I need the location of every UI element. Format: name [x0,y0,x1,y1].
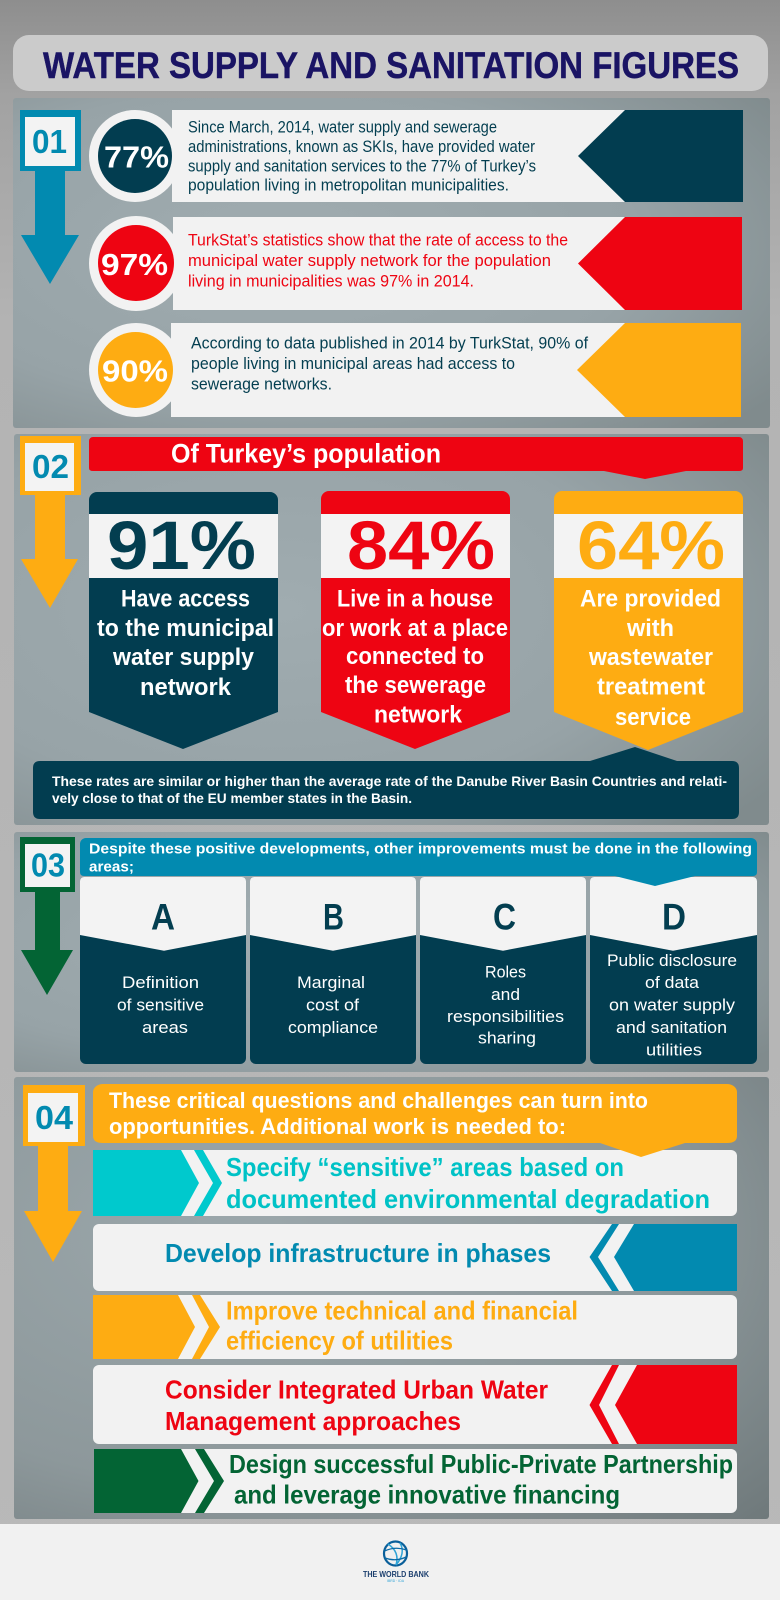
card: 84 percent: connected to [346,643,484,670]
badge and arrow 04 [23,1085,85,1262]
panel: section 02 [14,434,769,825]
banner: improvements [80,838,757,886]
title [13,35,768,91]
card C: and [491,985,520,1004]
row: integrated urban water management: Management approaches [165,1406,461,1436]
card: 91 percent [89,492,278,749]
row: integrated urban water management: Consider Integrated Urban Water [165,1375,548,1405]
row: 97 percent: TurkStat’s statistics show that the rate of access to the [188,232,568,250]
card: 91 percent: to the municipal [97,615,274,642]
card C: responsibilities [447,1007,564,1026]
card A: of sensitive [117,996,204,1015]
banner: opportunities [93,1084,737,1157]
card: 91 percent: water supply [112,644,254,671]
row: 97 percent [89,216,742,311]
row: 97 percent: living in municipalities was 97% in 2014. [188,273,474,291]
row: technical efficiency [93,1295,737,1359]
banner: improvements: areas; [89,859,134,876]
card: 84 percent: Live in a house [337,586,493,613]
card: 64 percent [554,491,743,750]
row: sensitive areas: Specify “sensitive” areas based on [226,1152,624,1182]
row: 77 percent: 77% [104,140,169,174]
card: 91 percent: 91% [107,507,256,584]
banner: of Turkey's population: Of Turkey’s population [171,439,441,469]
row: sensitive areas: documented environmental degradation [226,1184,710,1214]
badge and arrow 02 [20,436,81,608]
badge and arrow 04: 04 [35,1099,74,1136]
World Bank wordmark: IBRD · IDA [387,1579,405,1583]
card C [420,877,586,1064]
card D: on water supply [609,996,736,1015]
row: technical efficiency: efficiency of utilities [226,1326,453,1356]
row: technical efficiency: Improve technical and financial [226,1296,578,1326]
card: 64 percent: service [615,704,691,731]
card: 91 percent: Have access [121,586,250,613]
card B: cost of [306,996,359,1015]
row: public-private partnership: Design successful Public-Private Partnership [229,1449,733,1479]
card: 64 percent: with [626,615,674,642]
panel: section 04 [14,1077,769,1519]
card D: and sanitation [616,1018,727,1037]
note callout: vely close to that of the EU member states in the Basin. [52,790,412,806]
card C: C [493,896,516,937]
card D: utilities [646,1041,702,1060]
row: public-private partnership: and leverage innovative financing [234,1480,620,1510]
row: 97 percent: 97% [101,247,168,282]
World Bank wordmark [363,1570,429,1583]
card: 91 percent: network [140,674,231,701]
row: 77 percent: administrations, known as SKIs, have provided water [188,138,535,156]
card B: compliance [288,1018,378,1037]
card B: B [323,896,344,937]
note callout [33,747,739,819]
World Bank wordmark: THE WORLD BANK [363,1570,429,1579]
row: public-private partnership [94,1449,737,1513]
panel: section 03 [14,832,769,1072]
card D: of data [645,973,700,992]
banner: improvements: Despite these positive developments, other improvements must be done in the following [89,840,752,857]
card: 64 percent: 64% [577,507,725,584]
row: infrastructure in phases: Develop infrastructure in phases [165,1238,551,1268]
card: 64 percent: treatment [597,674,705,700]
card: 84 percent [321,491,510,749]
row: sensitive areas [93,1150,737,1216]
card B: Marginal [297,973,365,992]
card: 64 percent: Are provided [580,586,721,613]
row: 90 percent: sewerage networks. [191,375,332,393]
row: 77 percent: Since March, 2014, water supply and sewerage [188,119,497,137]
card A: areas [142,1018,188,1037]
badge and arrow 01 [20,110,81,284]
card A [80,877,246,1064]
card: 84 percent: 84% [347,507,495,584]
card: 84 percent: or work at a place [322,615,508,642]
note callout: These rates are similar or higher than the average rate of the Danube River Basin Countries and relati- [52,773,727,789]
panel: section 01 [13,98,770,428]
banner: opportunities: opportunities. Additional work is needed to: [109,1114,566,1139]
banner: of Turkey's population [89,437,743,479]
card D [590,877,757,1064]
card: 84 percent: network [374,702,462,729]
row: 90 percent: According to data published in 2014 by TurkStat, 90% of [191,334,588,352]
row: 77 percent: supply and sanitation services to the 77% of Turkey’s [188,158,536,176]
card: 64 percent: wastewater [588,644,713,671]
badge and arrow 01: 01 [32,123,67,160]
row: 77 percent [89,110,743,202]
row: infrastructure in phases [93,1224,737,1291]
card C: Roles [485,963,526,982]
footer [0,1524,780,1600]
card: 84 percent: the sewerage [345,672,486,699]
row: 97 percent: municipal water supply network for the population [188,252,551,270]
row: integrated urban water management [93,1365,737,1444]
card C: sharing [478,1028,536,1048]
badge and arrow 03: 03 [31,847,65,884]
card D: D [662,896,686,937]
row: 90 percent: 90% [102,354,168,389]
card A: Definition [122,973,199,992]
card A: A [151,896,175,937]
row: 90 percent [89,323,741,417]
card D: Public disclosure [607,951,737,970]
icon: World Bank globe [384,1542,407,1566]
badge and arrow 03 [20,837,75,995]
row: 77 percent: population living in metropolitan municipalities. [188,176,509,194]
banner: opportunities: These critical questions and challenges can turn into [109,1088,648,1113]
badge and arrow 02: 02 [32,448,69,485]
row: 90 percent: people living in municipal areas had access to [191,355,515,373]
card B [250,877,416,1064]
